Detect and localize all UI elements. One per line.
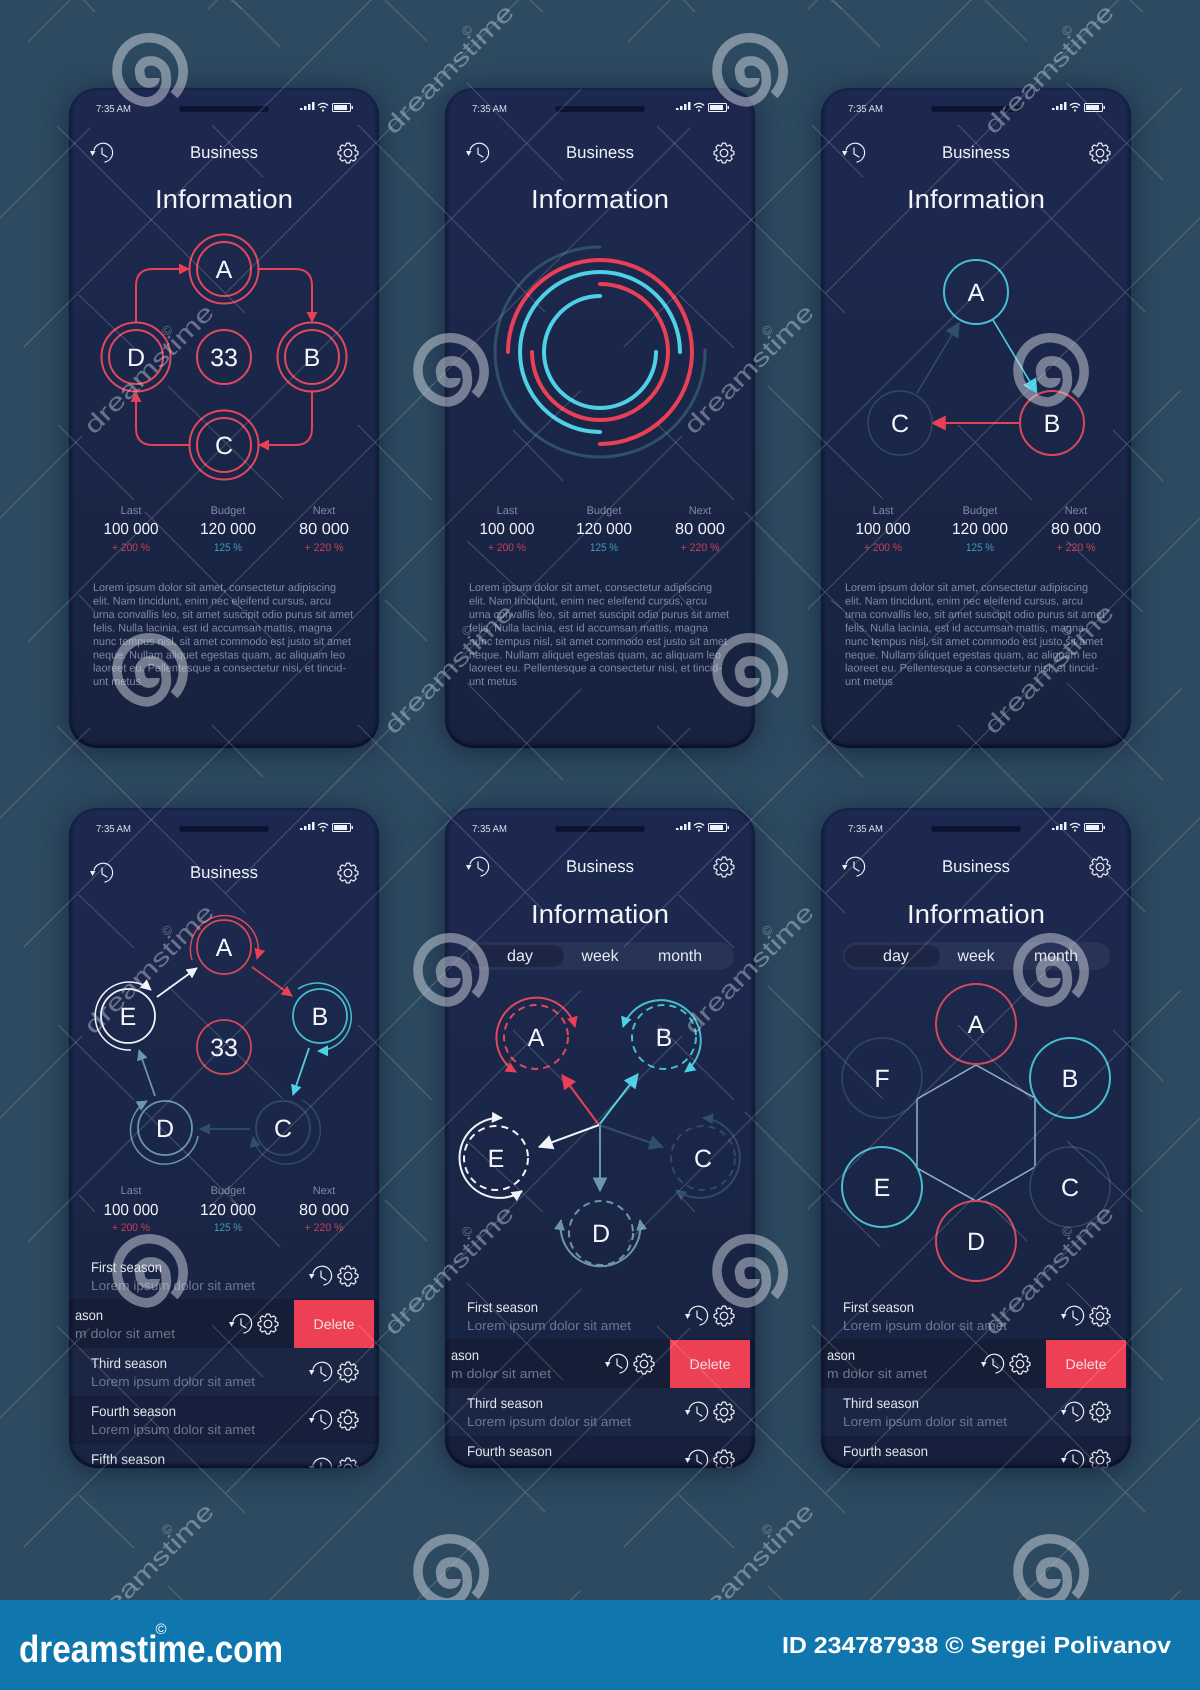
tabs: day week month — [843, 942, 1110, 970]
chart: hexagon of six nodes: A — [968, 1011, 985, 1039]
season list: Third season — [91, 1355, 167, 1371]
season list — [821, 1299, 1131, 1470]
stats row: Budget — [963, 505, 997, 517]
tabs: day week month: week — [957, 948, 995, 965]
icon: history — [842, 143, 865, 162]
chart: radial flow with dashed nodes: D — [592, 1220, 610, 1248]
stats row: 80 000 — [299, 1202, 349, 1219]
stats row: 120 000 — [576, 521, 632, 538]
tabs: day week month: day — [883, 948, 909, 965]
stats row: + 220 % — [304, 1222, 344, 1234]
season list: Lorem ipsum dolor sit amet — [843, 1318, 1007, 1333]
stats row: + 200 % — [864, 542, 902, 554]
stats row: Next — [1065, 505, 1087, 517]
status bar — [472, 102, 729, 115]
status bar — [96, 102, 353, 115]
stats row: Last — [121, 1185, 141, 1197]
chart: concentric arcs — [495, 247, 705, 457]
stats row — [480, 505, 725, 554]
season list: ason — [451, 1347, 479, 1363]
heading: Business: Business — [190, 863, 258, 882]
chart: five node cycle: B — [312, 1003, 328, 1031]
stats row: 125 % — [214, 542, 242, 554]
status bar — [848, 102, 1105, 115]
stats row: 125 % — [966, 542, 994, 554]
title: Information: Information — [907, 899, 1045, 929]
paragraph text: felis. Nulla lacinia, est id accumsan mattis, magna — [93, 622, 333, 634]
paragraph text: Lorem ipsum dolor sit amet, consectetur adipiscing — [469, 582, 712, 594]
chart: five node cycle: 33 — [210, 1034, 238, 1062]
stats row: Last — [497, 505, 517, 517]
heading: Business: Business — [190, 143, 258, 162]
season list: Delete — [314, 1316, 355, 1332]
tabs: day week month: month — [658, 948, 702, 965]
icon: settings gear — [714, 857, 734, 877]
status bar: 7:35 AM — [848, 824, 883, 835]
status bar: 7:35 AM — [472, 824, 507, 835]
logo: dreamstime.com: © — [155, 1621, 167, 1638]
panel: phone 3 triangle flow — [821, 88, 1131, 748]
paragraph text: elit. Nam tincidunt, enim nec eleifend cursus, arcu — [845, 595, 1083, 607]
chart: hexagon of six nodes: E — [874, 1174, 890, 1202]
tabs: day week month — [467, 942, 734, 970]
chart: hexagon of six nodes: F — [874, 1065, 890, 1093]
paragraph text — [93, 582, 353, 688]
panel: phone 1 cycle diagram — [69, 88, 379, 748]
stats row: + 220 % — [304, 542, 344, 554]
paragraph text: nunc tempus nisl, sit amet commodo est justo sit amet — [469, 636, 727, 648]
logo: dreamstime.com: dreamstime.com — [19, 1629, 283, 1671]
paragraph text — [469, 582, 729, 688]
season list: Lorem ipsum dolor sit amet — [467, 1318, 631, 1333]
icon: settings gear — [338, 863, 358, 883]
paragraph text: elit. Nam tincidunt, enim nec eleifend cursus, arcu — [93, 595, 331, 607]
status bar — [96, 822, 353, 835]
tabs: day week month: week — [581, 948, 619, 965]
season list: First season — [467, 1299, 538, 1315]
image ID and credit: ID 234787938 © Sergei Polivanov — [782, 1632, 1171, 1658]
chart: four node cycle: B — [304, 344, 320, 372]
stats row: Last — [121, 505, 141, 517]
stats row: 120 000 — [200, 1202, 256, 1219]
title: Information: Information — [907, 184, 1045, 214]
stats row: + 200 % — [112, 1222, 150, 1234]
paragraph text: nunc tempus nisl, sit amet commodo est justo sit amet — [93, 636, 351, 648]
stats row: 120 000 — [200, 521, 256, 538]
tabs: day week month: day — [507, 948, 533, 965]
season list: ason — [827, 1347, 855, 1363]
chart: radial flow with dashed nodes: A — [528, 1024, 545, 1052]
title: Information: Information — [531, 184, 669, 214]
chart: five node cycle: A — [216, 934, 233, 962]
panel: phone 2 concentric rings — [445, 88, 755, 748]
icon: settings gear — [338, 143, 358, 163]
stats row: + 220 % — [1056, 542, 1096, 554]
stats row: Next — [689, 505, 711, 517]
chart: four node cycle: 33 — [210, 344, 238, 372]
season list: m dolor sit amet — [75, 1326, 175, 1341]
chart: four node cycle: C — [215, 432, 233, 460]
chart: five node cycle — [95, 916, 351, 1164]
season list: Third season — [843, 1395, 919, 1411]
chart: radial flow with dashed nodes: B — [656, 1024, 672, 1052]
season list — [445, 1299, 755, 1470]
paragraph text: laoreet eu. Pellentesque a consectetur nisi, et tincid- — [93, 663, 346, 675]
panel: phone 6 hexagon with list — [821, 808, 1131, 1468]
icon: settings gear — [714, 143, 734, 163]
paragraph text: felis. Nulla lacinia, est id accumsan mattis, magna — [469, 622, 709, 634]
icon: settings gear — [1090, 857, 1110, 877]
stats row: 80 000 — [675, 521, 725, 538]
panel: phone 5 radial arrows with list — [445, 808, 755, 1468]
status bar: 7:35 AM — [96, 824, 131, 835]
season list: Fourth season — [91, 1403, 176, 1419]
stats row — [104, 505, 349, 554]
chart: five node cycle: D — [156, 1115, 174, 1143]
stats row: 120 000 — [952, 521, 1008, 538]
stats row: + 220 % — [680, 542, 720, 554]
stats row: + 200 % — [112, 542, 150, 554]
stats row — [856, 505, 1101, 554]
heading: Business: Business — [942, 143, 1010, 162]
heading: Business: Business — [566, 143, 634, 162]
stats row: Last — [873, 505, 893, 517]
chart: radial flow with dashed nodes: C — [694, 1145, 712, 1173]
paragraph text: unt metus — [845, 676, 893, 688]
paragraph text: urna convallis leo, sit amet suscipit odio purus sit amet — [845, 609, 1105, 621]
chart: radial flow with dashed nodes: E — [488, 1145, 504, 1173]
chart: radial flow with dashed nodes — [460, 998, 740, 1266]
season list: Delete — [1066, 1356, 1107, 1372]
season list: Lorem ipsum dolor sit amet — [467, 1414, 631, 1429]
icon: history — [466, 857, 489, 876]
paragraph text: unt metus — [469, 676, 517, 688]
paragraph text: urna convallis leo, sit amet suscipit odio purus sit amet — [93, 609, 353, 621]
paragraph text: unt metus — [93, 676, 141, 688]
paragraph text: neque. Nullam aliquet egestas quam, ac aliquam leo — [845, 649, 1097, 661]
icon: history — [90, 863, 113, 882]
paragraph text: laoreet eu. Pellentesque a consectetur nisi, et tincid- — [469, 663, 722, 675]
stats row: Next — [313, 1185, 335, 1197]
paragraph text: Lorem ipsum dolor sit amet, consectetur adipiscing — [93, 582, 336, 594]
season list: m dolor sit amet — [451, 1366, 551, 1381]
icon: history — [466, 143, 489, 162]
stats row: Budget — [211, 505, 245, 517]
paragraph text: Lorem ipsum dolor sit amet, consectetur adipiscing — [845, 582, 1088, 594]
stats row: + 200 % — [488, 542, 526, 554]
paragraph text: laoreet eu. Pellentesque a consectetur nisi, et tincid- — [845, 663, 1098, 675]
status bar: 7:35 AM — [848, 104, 883, 115]
icon: history — [90, 143, 113, 162]
status bar: 7:35 AM — [96, 104, 131, 115]
stats row — [104, 1185, 349, 1234]
chart: four node cycle: A — [216, 256, 233, 284]
icon: settings gear — [1090, 143, 1110, 163]
stats row: 80 000 — [1051, 521, 1101, 538]
status bar — [848, 822, 1105, 835]
paragraph text: felis. Nulla lacinia, est id accumsan mattis, magna — [845, 622, 1085, 634]
paragraph text: nunc tempus nisl, sit amet commodo est justo sit amet — [845, 636, 1103, 648]
panel: phone 4 five node cycle with list — [69, 808, 379, 1468]
chart: three node triangle: C — [891, 410, 909, 438]
chart: three node triangle: A — [968, 279, 985, 307]
paragraph text: urna convallis leo, sit amet suscipit odio purus sit amet — [469, 609, 729, 621]
chart: four node cycle — [102, 234, 346, 480]
title: Information: Information — [531, 899, 669, 929]
season list: Delete — [690, 1356, 731, 1372]
season list: Fourth season — [843, 1443, 928, 1459]
stats row: 100 000 — [480, 521, 535, 538]
status bar: 7:35 AM — [472, 104, 507, 115]
season list: Lorem ipsum dolor sit amet — [843, 1414, 1007, 1429]
season list: Third season — [467, 1395, 543, 1411]
chart: hexagon of six nodes: C — [1061, 1174, 1079, 1202]
status bar — [472, 822, 729, 835]
stats row: 100 000 — [104, 1202, 159, 1219]
stats row: Budget — [587, 505, 621, 517]
paragraph text: neque. Nullam aliquet egestas quam, ac aliquam leo — [93, 649, 345, 661]
chart: four node cycle: D — [127, 344, 145, 372]
stats row: Budget — [211, 1185, 245, 1197]
season list — [69, 1259, 379, 1478]
season list: First season — [91, 1259, 162, 1275]
season list: Fourth season — [467, 1443, 552, 1459]
chart: hexagon of six nodes: D — [967, 1228, 985, 1256]
icon: history — [842, 857, 865, 876]
tabs: day week month: month — [1034, 948, 1078, 965]
stats row: 100 000 — [856, 521, 911, 538]
paragraph text: elit. Nam tincidunt, enim nec eleifend cursus, arcu — [469, 595, 707, 607]
season list: Fifth season — [91, 1451, 165, 1467]
season list: Lorem ipsum dolor sit amet — [91, 1278, 255, 1293]
stats row: 80 000 — [299, 521, 349, 538]
stats row: 125 % — [590, 542, 618, 554]
stats row: 100 000 — [104, 521, 159, 538]
chart: hexagon of six nodes — [842, 984, 1110, 1281]
season list: m dolor sit amet — [827, 1366, 927, 1381]
stats row: Next — [313, 505, 335, 517]
chart: five node cycle: C — [274, 1115, 292, 1143]
paragraph text: neque. Nullam aliquet egestas quam, ac aliquam leo — [469, 649, 721, 661]
heading: Business: Business — [566, 857, 634, 876]
title: Information: Information — [155, 184, 293, 214]
chart: five node cycle: E — [120, 1003, 136, 1031]
season list: Lorem ipsum dolor sit amet — [91, 1422, 255, 1437]
season list: Lorem ipsum dolor sit amet — [91, 1374, 255, 1389]
paragraph text — [845, 582, 1105, 688]
chart: hexagon of six nodes: B — [1062, 1065, 1078, 1093]
stats row: 125 % — [214, 1222, 242, 1234]
season list: First season — [843, 1299, 914, 1315]
footer credit band — [0, 1600, 1200, 1690]
heading: Business: Business — [942, 857, 1010, 876]
chart: three node triangle — [868, 260, 1084, 455]
season list: ason — [75, 1307, 103, 1323]
chart: three node triangle: B — [1044, 410, 1060, 438]
